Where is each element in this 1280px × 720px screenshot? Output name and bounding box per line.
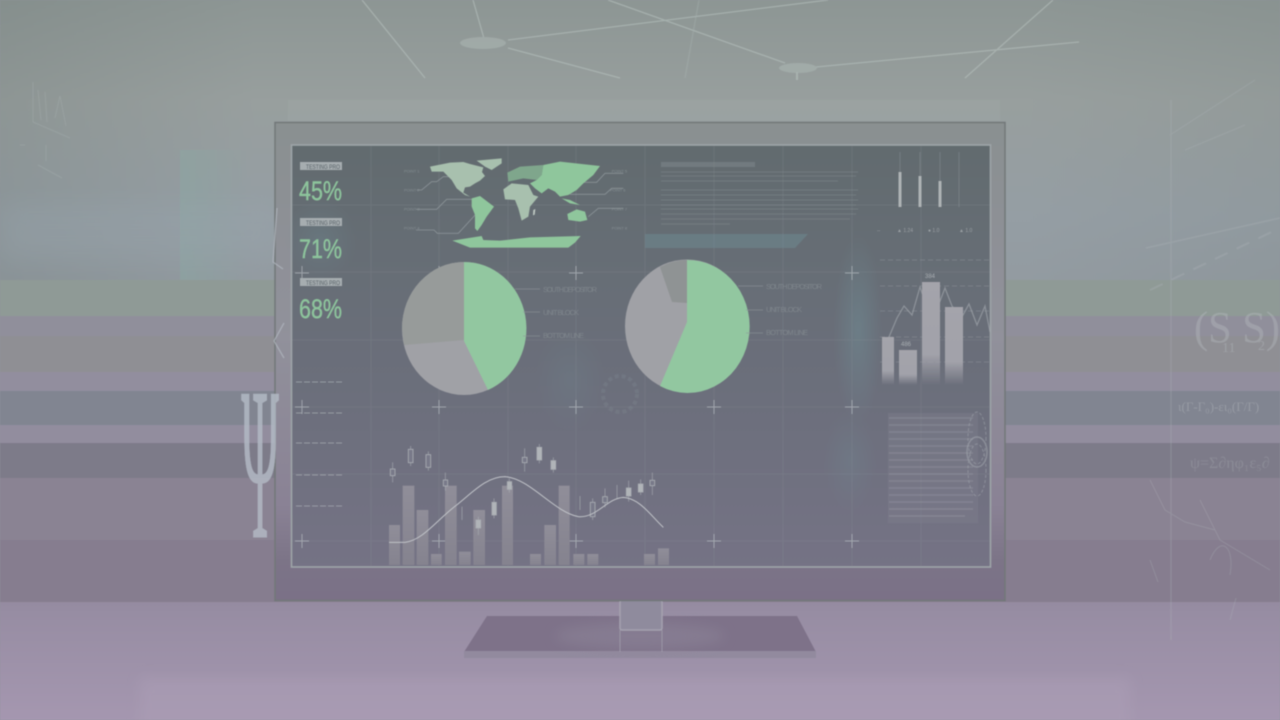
- trend curve: [389, 477, 663, 542]
- mini chart legend: ▲ 1.0: [959, 228, 973, 234]
- australia: [567, 209, 587, 222]
- south america: [472, 196, 494, 231]
- dashed scale lines: [296, 382, 344, 506]
- right pie labels: SOUTH DEPOSITOR: [766, 282, 823, 291]
- mini chart legend: [877, 228, 973, 234]
- right pie green slice: [660, 260, 750, 393]
- left pie labels: UNIT BLOCK: [543, 308, 579, 317]
- screen glows: [284, 200, 882, 510]
- bottom candlestick and bar chart: [389, 444, 669, 565]
- map connector lines and labels: POINT 5: [612, 168, 628, 173]
- map connector lines and labels: POINT 8: [612, 226, 628, 231]
- stat: 68 percent: TESTING PRO: [306, 280, 340, 287]
- horizontal background bands: [0, 280, 1280, 602]
- map connector lines and labels: POINT 7: [612, 207, 628, 212]
- map connector lines and labels: [404, 168, 628, 233]
- mini chart legend: ● 1.0: [928, 228, 940, 234]
- right math formulas: 11: [1222, 341, 1235, 356]
- teal band: [645, 234, 808, 248]
- asia: [530, 162, 600, 197]
- left pie green slice: [464, 262, 526, 390]
- africa: [503, 183, 538, 221]
- gauge icon: [967, 412, 987, 496]
- right bar and line chart: [880, 260, 990, 385]
- right pie labels: BOTTOM LINE: [766, 328, 808, 337]
- right pie chart: [625, 260, 823, 393]
- stat: 45 percent: [299, 162, 342, 206]
- map connector lines and labels: POINT 6: [610, 187, 626, 192]
- candlesticks: [390, 444, 655, 535]
- map connector lines and labels: POINT 4: [404, 226, 420, 231]
- stat: 45 percent: TESTING PRO: [306, 164, 340, 171]
- top text block: [661, 162, 858, 224]
- right math formulas: [1178, 303, 1280, 472]
- ceiling network lines: [362, 0, 1079, 80]
- stat: 71 percent: [299, 218, 342, 264]
- greenland: [477, 158, 502, 170]
- histogram bars: [389, 486, 669, 565]
- right bar and line chart: 486: [901, 342, 912, 348]
- right chalk lines: [1146, 80, 1280, 640]
- right bar and line chart: 384: [925, 274, 936, 280]
- right math formulas: 2: [1258, 339, 1265, 354]
- left pie labels: [515, 285, 598, 340]
- antarctica: [452, 236, 581, 248]
- stat: 71 percent: 71%: [299, 234, 342, 264]
- monitor stand neck: [620, 600, 662, 652]
- indonesia: [562, 198, 580, 205]
- greek psi symbol: Ψ: [241, 344, 279, 585]
- screen grid: [292, 146, 990, 566]
- mini chart legend: --: [877, 228, 881, 234]
- map connector lines and labels: POINT 1: [404, 168, 420, 173]
- right math formulas: ψ=Σ∂ηφ₁ε₅∂: [1190, 455, 1270, 472]
- right pie labels: UNIT BLOCK: [766, 305, 802, 314]
- monitor bezel: [275, 122, 1005, 600]
- monitor stand base: [464, 616, 816, 652]
- stats column: [299, 162, 342, 324]
- map connector lines and labels: POINT 3: [404, 207, 420, 212]
- right pie labels: [738, 282, 823, 337]
- world map: [430, 158, 600, 248]
- europe: [507, 165, 543, 182]
- stat: 68 percent: [299, 278, 342, 324]
- left bezel chalk marks: [273, 208, 284, 358]
- top right mini bar chart: [877, 152, 973, 234]
- map connector lines and labels: POINT 2: [404, 187, 420, 192]
- monitor: [275, 100, 1005, 658]
- grid crosses: [295, 266, 859, 548]
- mini chart legend: ▲ 1.24: [897, 228, 913, 234]
- stat: 68 percent: 68%: [299, 294, 342, 324]
- screen: [292, 145, 990, 567]
- left handwritten formula: [20, 82, 70, 178]
- lower right text block: [888, 413, 978, 523]
- stat: 45 percent: 45%: [299, 176, 342, 206]
- left pie labels: SOUTH DEPOSITOR: [543, 285, 598, 294]
- madagascar: [533, 209, 535, 215]
- left pie chart: [402, 262, 598, 395]
- right math formulas: ι(Γ-Γ₀)-ει₀(Γ/Γ): [1178, 399, 1259, 414]
- north america: [430, 162, 485, 197]
- stat: 71 percent: TESTING PRO: [306, 220, 340, 227]
- left pie labels: BOTTOM LINE: [543, 331, 584, 340]
